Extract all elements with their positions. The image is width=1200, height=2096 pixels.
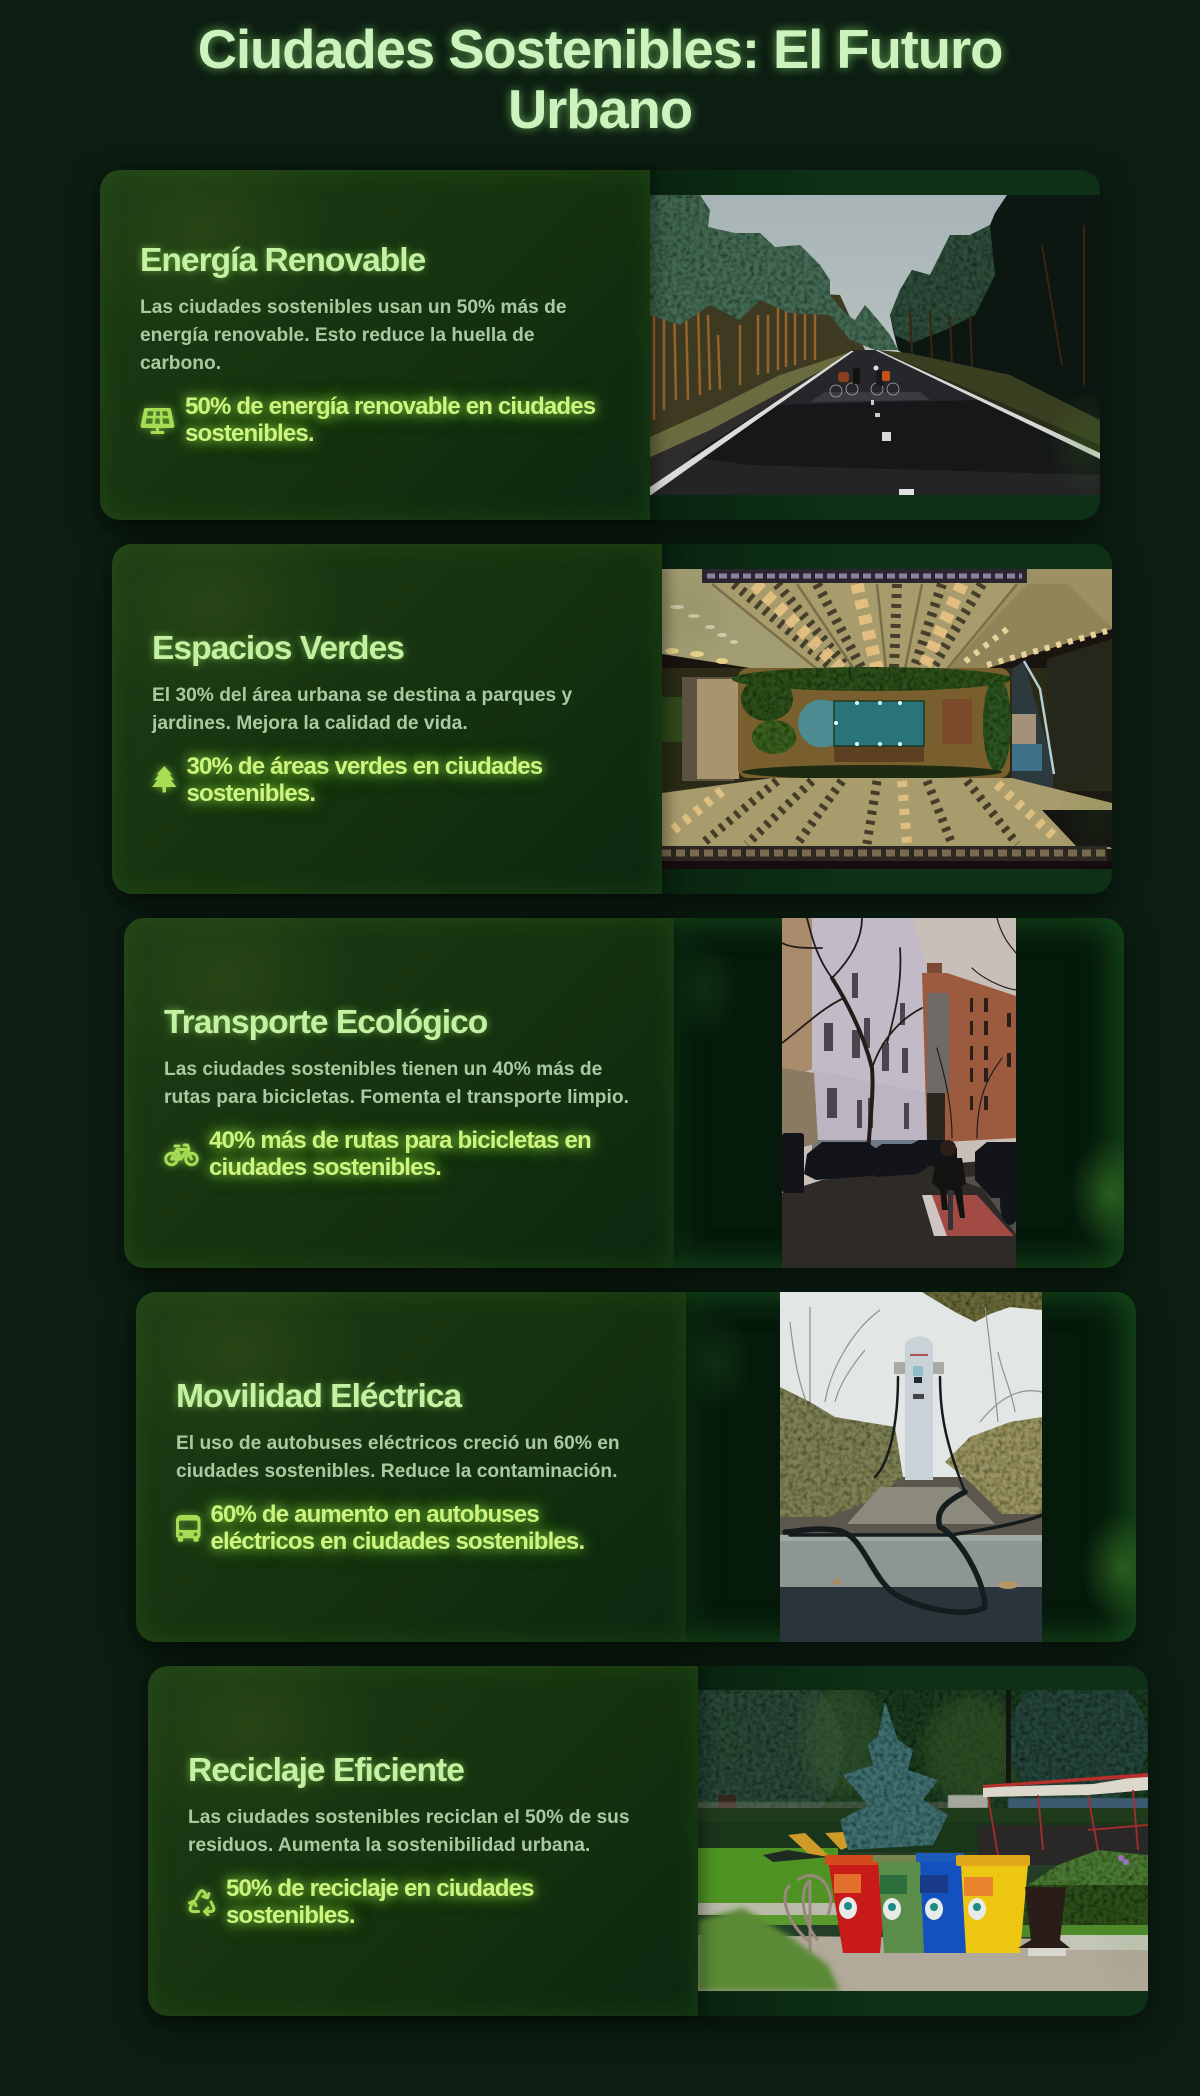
panel: transporte ecológico [124,918,1124,1268]
bike rack [785,1875,831,1952]
title: Ciudades Sostenibles: El Futuro Urbano [198,19,1002,140]
description: Las ciudades sostenibles reciclan el 50% de sus residuos. Aumenta la sostenibilidad urbana. [188,1807,630,1856]
road [650,350,1100,495]
icon: recycle [184,1885,220,1920]
description: Las ciudades sostenibles usan un 50% más de energía renovable. Esto reduce la huella de carbono. [140,297,567,374]
photo: aerial courtyard [662,569,1112,869]
heading: Espacios Verdes [152,630,404,667]
foliage at top [922,1292,1042,1322]
panel: movilidad eléctrica [136,1292,1136,1642]
stat callout: 40% más de rutas para bicicletas en ciudades sostenibles. [209,1127,591,1181]
cyclist [932,1140,966,1230]
glow background [686,1292,1136,1642]
text block: transporte ecológico [124,918,674,1268]
slab [847,1487,995,1524]
heading: Movilidad Eléctrica [176,1378,461,1415]
swimming pool [798,700,834,747]
cables [785,1377,1042,1612]
conifer [840,1702,948,1850]
stat callout: 50% de energía renovable en ciudades sostenibles. [185,393,595,447]
heading: Transporte Ecológico [164,1004,487,1041]
text block: reciclaje eficiente [148,1666,698,2016]
charger [905,1336,933,1480]
blurred foreground bush [698,1908,840,1991]
trash can [1018,1887,1070,1948]
road [782,1158,1016,1268]
photo panel: ev charger [686,1292,1136,1642]
bottom building [662,778,1112,849]
text block: energía renovable [100,170,650,520]
photo: park with bins [698,1690,1148,1991]
stat callout: 60% de aumento en autobuses eléctricos en ciudades sostenibles. [210,1501,584,1555]
deck chairs [788,1833,828,1858]
heading: Reciclaje Eficiente [188,1752,464,1789]
icon: tree [150,763,179,796]
icon: bicycle [160,1139,204,1171]
red structure [983,1775,1148,1797]
text block: movilidad eléctrica [136,1292,686,1642]
panel: reciclaje eficiente [148,1666,1148,2016]
description: El uso de autobuses eléctricos creció un 60% en ciudades sostenibles. Reduce la contaminación. [176,1433,620,1482]
background band [698,1802,978,1809]
curb [780,1535,1042,1587]
courtyard [662,668,1047,793]
glow overlay [650,170,1100,520]
glow background [674,918,1124,1268]
heading: Energía Renovable [140,242,425,279]
text block: espacios verdes [112,544,662,894]
bike lane [932,1195,1014,1236]
stat callout: 50% de reciclaje en ciudades sostenibles. [226,1875,534,1929]
grass [698,1848,838,1908]
top building [662,569,1112,670]
description: Las ciudades sostenibles tienen un 40% más de rutas para bicicletas. Fomenta el transporte limpio. [164,1059,629,1108]
trees: left [650,195,898,350]
glow overlay [698,1666,1148,2016]
cyclists [830,366,899,397]
pavement [698,1935,1148,1991]
icon: solar panel [136,402,179,439]
icon: bus [170,1510,206,1546]
right side service area [1012,661,1054,791]
parked cars [782,1133,1020,1225]
photo panel: highway with cyclists [650,170,1100,520]
description: El 30% del área urbana se destina a parques y jardines. Mejora la calidad de vida. [152,685,572,734]
photo panel: recycling bins [698,1666,1148,2016]
photo: city street [782,918,1016,1268]
stat callout: 30% de áreas verdes en ciudades sostenibles. [186,753,542,807]
photo: forest road [650,195,1100,495]
grasses [790,1307,1042,1422]
photo panel: courtyard from below [662,544,1112,894]
panel: energía renovable [100,170,1100,520]
recycling bins [825,1853,1030,1953]
bare trees [782,918,1016,1168]
photo: charging station [780,1292,1042,1642]
panel: espacios verdes [112,544,1112,894]
ground [780,1477,1042,1537]
roof rail [662,846,1107,861]
hedge right and flowers [1020,1885,1148,1927]
photo panel: street with bike lane [674,918,1124,1268]
glow overlay [662,544,1112,894]
trees: right [890,195,1100,430]
